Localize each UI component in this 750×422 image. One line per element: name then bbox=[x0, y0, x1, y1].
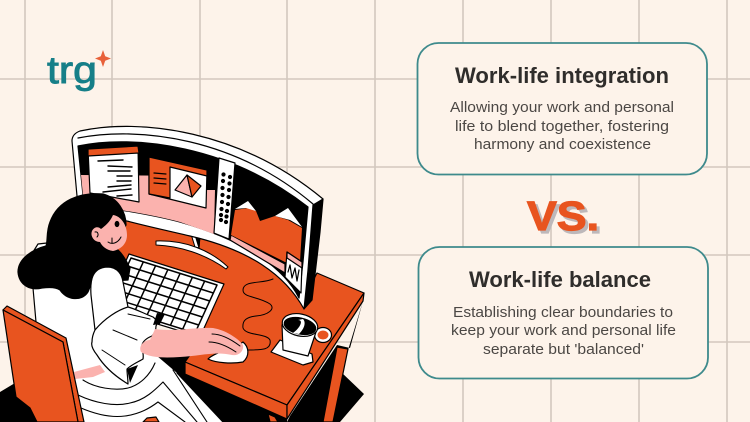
belt bbox=[74, 365, 105, 379]
mini chart window bbox=[285, 252, 302, 293]
panel: work-life balance bbox=[418, 247, 708, 378]
body text bbox=[450, 99, 674, 153]
monitor bbox=[72, 126, 323, 309]
screen pink wallpaper bbox=[81, 175, 215, 234]
arm and hand bbox=[140, 328, 243, 357]
collar behind bbox=[33, 243, 60, 262]
chair back face bbox=[3, 310, 78, 422]
keyboard keys bbox=[109, 258, 217, 333]
dotted panel bbox=[214, 158, 235, 239]
body text: keep your work and personal life bbox=[451, 322, 676, 339]
napkin bbox=[271, 340, 313, 365]
sidebar lines bbox=[154, 173, 166, 184]
cable bbox=[243, 279, 273, 350]
desk front edge bbox=[185, 362, 287, 419]
stand base bbox=[156, 241, 228, 269]
illustration: woman working at a curved monitor bbox=[0, 126, 364, 422]
document page bbox=[88, 146, 139, 202]
heading: Work-life balance bbox=[469, 267, 651, 292]
body text: Establishing clear boundaries to bbox=[453, 304, 673, 321]
body text bbox=[451, 304, 676, 358]
desk top bbox=[115, 210, 364, 405]
robe outline bbox=[33, 288, 223, 422]
card outline bbox=[418, 247, 708, 378]
cup handle bbox=[316, 329, 330, 341]
eye bbox=[115, 222, 119, 226]
bezel inner line bbox=[78, 134, 313, 204]
sleeve creases bbox=[102, 314, 150, 365]
editor title bar and sidebar bbox=[149, 157, 207, 198]
desk bbox=[115, 210, 364, 422]
body text: life to blend together, fostering bbox=[455, 118, 669, 135]
face bbox=[91, 215, 127, 251]
monitor stand bbox=[156, 234, 228, 269]
coffee bbox=[283, 315, 317, 337]
mountain pane bbox=[230, 201, 302, 293]
editor panel bbox=[149, 157, 207, 208]
chair back side bbox=[3, 306, 84, 422]
desk side edge bbox=[287, 293, 364, 419]
floor shadow bbox=[0, 301, 364, 422]
VS text: VS. bbox=[527, 193, 599, 239]
robe bbox=[33, 282, 223, 422]
upper arm bbox=[91, 267, 128, 330]
smile and ear bbox=[95, 232, 121, 243]
keyboard bbox=[105, 254, 224, 337]
panel: work-life integration bbox=[418, 43, 707, 174]
snow caps bbox=[235, 201, 302, 227]
stand neck bbox=[191, 234, 200, 248]
finger lines bbox=[209, 334, 240, 352]
logo star bbox=[95, 50, 111, 67]
dotted panel strip bbox=[214, 158, 235, 239]
heading: Work-life integration bbox=[455, 63, 669, 88]
VS shadow: VS. bbox=[530, 196, 602, 242]
desk right leg bbox=[323, 347, 348, 422]
monitor side bbox=[304, 199, 323, 309]
logo wordmark: trg bbox=[47, 50, 97, 92]
hair bbox=[18, 194, 130, 299]
window: document bbox=[88, 146, 139, 202]
window: image editor bbox=[149, 157, 207, 208]
orange mountains bbox=[231, 208, 302, 262]
sleeve shadows bbox=[127, 313, 165, 383]
cup rim bbox=[280, 310, 320, 340]
orange hem bbox=[143, 417, 159, 422]
chair bbox=[3, 306, 84, 422]
body text: harmony and coexistence bbox=[474, 136, 651, 153]
body text: separate but 'balanced' bbox=[483, 341, 644, 358]
document text lines bbox=[98, 160, 132, 196]
keyboard base bbox=[105, 254, 224, 337]
pink strip bbox=[230, 235, 285, 273]
coffee bbox=[271, 310, 332, 365]
monitor bezel bbox=[72, 126, 323, 309]
VS label bbox=[527, 193, 602, 242]
sleeve bbox=[92, 307, 157, 384]
robe stripes bbox=[78, 363, 207, 422]
body text: Allowing your work and personal bbox=[450, 99, 674, 116]
card outline bbox=[418, 43, 707, 174]
woman bbox=[18, 194, 243, 422]
cup body bbox=[282, 325, 317, 356]
logo: trg bbox=[47, 50, 111, 92]
image icon bbox=[175, 175, 192, 197]
mouse bbox=[208, 342, 248, 363]
document title bar bbox=[88, 146, 139, 156]
screen bbox=[78, 142, 308, 298]
desk left leg bbox=[268, 414, 278, 422]
panel dots bbox=[221, 174, 230, 222]
